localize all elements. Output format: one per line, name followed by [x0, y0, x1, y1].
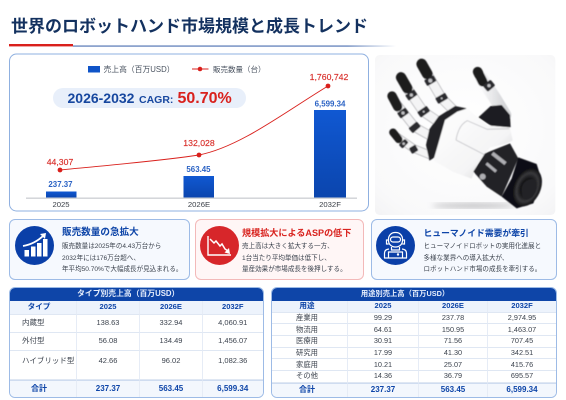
- table: revenue by type: タイプ: [28, 302, 50, 311]
- table: revenue by application: 150.95: [442, 325, 464, 334]
- table: revenue by application: 2025: [375, 301, 391, 310]
- table: revenue by type: 1,456.07: [218, 336, 247, 345]
- icon: humanoid robot: [376, 226, 415, 265]
- table: revenue by application: 2032F: [511, 301, 533, 310]
- table: revenue by application: 14.36: [374, 371, 392, 380]
- icon: declining chart: [200, 226, 239, 265]
- table: revenue by type: 134.49: [160, 336, 182, 345]
- bar chart: 2025: [52, 200, 70, 209]
- card text: 売上高は大きく拡大する一方、: [242, 243, 334, 250]
- table: revenue by type: 合計: [31, 384, 47, 393]
- sales volume line: [47, 72, 348, 172]
- panel: ASP decline card: [195, 218, 364, 280]
- bar chart: 237.37: [48, 180, 73, 189]
- table: revenue by type: 2026E: [160, 302, 182, 311]
- card text: [424, 242, 541, 273]
- CAGR pill: 50.70%: [178, 90, 232, 107]
- table: revenue by type: 1,082.36: [218, 356, 247, 364]
- card heading: ヒューマノイド需要が牽引: [424, 228, 529, 238]
- card text: 年平均50.70%で大幅成長が見込まれる。: [62, 266, 182, 273]
- bar chart: 2032F: [319, 200, 341, 209]
- table: revenue by application: 2,974.95: [508, 313, 536, 322]
- icon: robot hand image: [375, 56, 555, 215]
- table: revenue by application: 36.79: [444, 371, 462, 380]
- card text: 量産効果が市場成長を後押しする。: [242, 266, 347, 273]
- table: revenue by application: 用途別売上高（百万USD）: [361, 289, 449, 298]
- fingers: [392, 64, 505, 155]
- table: revenue by type: 42.66: [99, 356, 117, 364]
- finger joints: [397, 75, 495, 154]
- knuckles: [426, 106, 467, 161]
- panel: market size chart: [9, 54, 369, 212]
- table: revenue by application: 415.76: [511, 360, 533, 369]
- table: revenue by type: 4,060.91: [218, 318, 247, 327]
- table: revenue by type: 2032F: [222, 302, 244, 311]
- table: revenue by application: 6,599.34: [506, 385, 538, 394]
- table: revenue by application: 30.91: [374, 336, 392, 345]
- CAGR pill: [53, 88, 246, 108]
- table: revenue by application: 237.78: [442, 313, 464, 322]
- table: revenue by application: 25.07: [444, 360, 462, 369]
- table: revenue by application: 41.30: [444, 348, 462, 357]
- table: revenue by type: [9, 286, 264, 398]
- table: revenue by type: 332.94: [160, 318, 182, 327]
- table: revenue by application: [271, 286, 557, 398]
- thumb base: [478, 105, 511, 127]
- table: revenue by type: 138.63: [97, 318, 119, 327]
- card text: ヒューマノイドロボットの実用化進展と: [424, 243, 541, 250]
- table: revenue by type: 2025: [100, 302, 116, 311]
- panel: sales volume card: [9, 218, 190, 280]
- table: revenue by application: 1,463.07: [508, 325, 536, 334]
- legend: [88, 64, 266, 74]
- CAGR pill: 2026-2032: [68, 90, 135, 106]
- bar chart: 2026E: [188, 200, 210, 209]
- table: revenue by type: 563.45: [159, 384, 183, 393]
- finger tips: [392, 64, 483, 139]
- icon: rising bars: [15, 226, 54, 265]
- sales volume line: 1,760,742: [310, 72, 348, 82]
- table: revenue by application: 17.99: [374, 348, 392, 357]
- table: revenue by application: 563.45: [441, 385, 465, 394]
- card text: [62, 242, 182, 273]
- palm: [433, 108, 513, 179]
- table: revenue by application: 産業用: [296, 313, 318, 322]
- title underline: [9, 44, 394, 46]
- table: revenue by application: 64.61: [374, 325, 392, 334]
- table: revenue by application: 10.21: [374, 360, 392, 369]
- table: revenue by application: 2026E: [442, 301, 464, 310]
- card heading: 販売数量の急拡大: [62, 227, 139, 238]
- card text: [242, 242, 347, 273]
- table: revenue by application: 医療用: [296, 336, 318, 345]
- wrist mechanics: [473, 143, 518, 197]
- table: revenue by application: 物流用: [296, 325, 318, 334]
- card text: ロボットハンド市場の成長を牽引する。: [424, 266, 541, 273]
- table: revenue by type: ハイブリッド型: [22, 356, 74, 364]
- card text: 1台当たり平均単価は低下し、: [242, 255, 331, 262]
- sales volume line: 132,028: [183, 138, 215, 148]
- wrist cylinder: [502, 157, 542, 208]
- bar chart: 563.45: [186, 165, 211, 174]
- table: revenue by type: 237.37: [96, 384, 120, 393]
- table: revenue by application: 研究用: [296, 348, 318, 357]
- table: revenue by application: その他: [296, 371, 318, 380]
- card text: 2032年には176万台超へ、: [62, 255, 140, 262]
- table: revenue by type: タイプ別売上高（百万USD）: [77, 289, 179, 298]
- table: revenue by application: 71.56: [444, 336, 462, 345]
- table: revenue by application: 99.29: [374, 313, 392, 322]
- sales volume line: 44,307: [47, 157, 73, 167]
- legend: 売上高（百万USD）: [104, 64, 175, 74]
- card heading: 規模拡大によるASPの低下: [242, 228, 351, 238]
- legend: 販売数量（台）: [213, 64, 266, 74]
- title: 世界のロボットハンド市場規模と成長トレンド: [11, 16, 368, 36]
- table: revenue by application: 家庭用: [296, 360, 318, 369]
- card text: 販売数量は2025年の4.43万台から: [62, 243, 161, 250]
- table: revenue by application: 695.57: [511, 371, 533, 380]
- table: revenue by type: 56.08: [99, 336, 117, 345]
- table: revenue by application: 用途: [299, 301, 315, 310]
- table: revenue by application: 342.51: [511, 348, 533, 357]
- CAGR pill: CAGR:: [139, 94, 173, 106]
- card text: 多様な業界への導入拡大が、: [424, 255, 508, 262]
- bar chart: 6,599.34: [315, 100, 346, 108]
- table: revenue by application: 707.45: [511, 336, 533, 345]
- table: revenue by application: 237.37: [371, 385, 395, 394]
- table: revenue by type: 外付型: [22, 336, 44, 345]
- table: revenue by application: 合計: [299, 385, 315, 394]
- table: revenue by type: 6,599.34: [217, 384, 248, 393]
- table: revenue by type: 内蔵型: [22, 318, 44, 327]
- table: revenue by type: 96.02: [162, 356, 180, 364]
- bar chart: [26, 100, 357, 209]
- panel: humanoid demand card: [370, 218, 556, 280]
